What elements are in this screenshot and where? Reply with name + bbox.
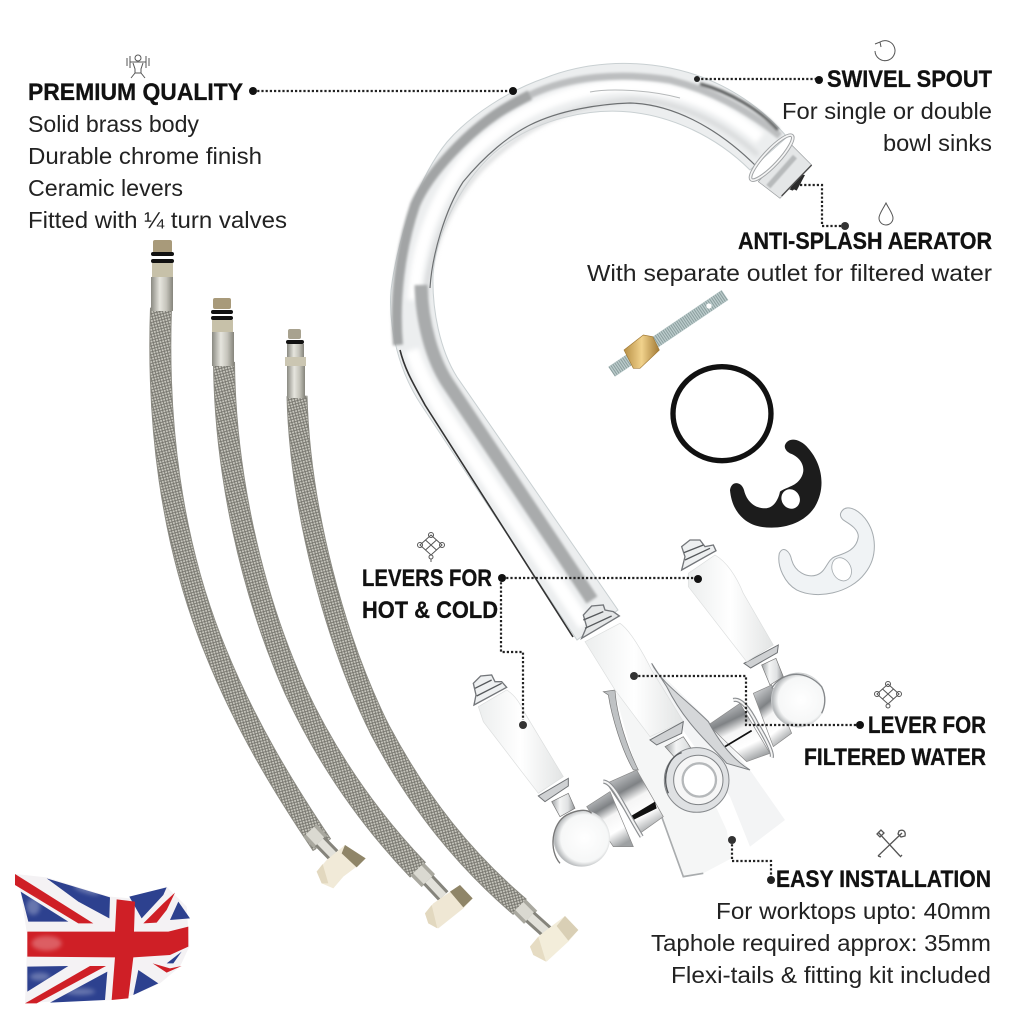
metal washer bbox=[779, 508, 874, 595]
heading: swivel spout bbox=[782, 66, 992, 156]
rear chrome body bbox=[650, 663, 785, 847]
heading: easy installation: Flexi-tails & fitting kit included bbox=[671, 962, 991, 988]
o-ring bbox=[673, 367, 771, 461]
grey body panel bbox=[652, 663, 750, 770]
icon: water drop bbox=[879, 203, 893, 225]
right ball bbox=[771, 673, 826, 727]
heading: lever for filtered water: FILTERED WATER bbox=[804, 744, 986, 771]
spout bbox=[391, 63, 787, 640]
fitting kit: threaded stud, o-ring, rubber gasket, metal washer bbox=[612, 295, 874, 595]
rubber gasket bbox=[730, 440, 822, 528]
leader: easy installation bbox=[728, 836, 775, 884]
flag: union jack bbox=[15, 874, 190, 1003]
icon: rotate arrow bbox=[875, 41, 895, 61]
heading: lever for filtered water: LEVER FOR bbox=[868, 712, 986, 739]
heading: easy installation: For worktops upto: 40mm bbox=[716, 898, 991, 924]
left barrel bbox=[587, 770, 663, 847]
heading: lever for filtered water bbox=[804, 712, 986, 771]
heading: anti-splash aerator: ANTI-SPLASH AERATOR bbox=[738, 228, 992, 255]
threaded stud bbox=[612, 295, 725, 372]
heading: swivel spout: For single or double bbox=[782, 98, 992, 124]
heading: premium quality: Ceramic levers bbox=[28, 175, 183, 201]
heading: anti-splash aerator bbox=[587, 228, 992, 286]
leader: premium quality bbox=[249, 87, 517, 95]
spout end collar and aerator bbox=[746, 131, 812, 198]
icon: knot right bbox=[874, 682, 902, 708]
icon: knot left bbox=[418, 532, 444, 562]
heading: easy installation bbox=[651, 866, 991, 988]
leader: lever for filtered water bbox=[630, 672, 864, 729]
leader: aerator bbox=[800, 185, 849, 230]
heading: anti-splash aerator: With separate outlet for filtered water bbox=[587, 260, 992, 286]
heading: premium quality: PREMIUM QUALITY bbox=[28, 79, 243, 106]
left ball bbox=[553, 810, 610, 867]
front tap body bbox=[603, 690, 732, 877]
heading: easy installation: EASY INSTALLATION bbox=[776, 866, 991, 893]
heading: easy installation: Taphole required approx: 35mm bbox=[651, 930, 991, 956]
icon: wrench and screwdriver bbox=[877, 830, 905, 857]
heading: swivel spout: SWIVEL SPOUT bbox=[827, 66, 992, 93]
tap body and levers bbox=[582, 540, 826, 877]
heading: premium quality: Durable chrome finish bbox=[28, 143, 262, 169]
icon: weightlifter bbox=[127, 55, 149, 78]
left lever bbox=[473, 675, 575, 817]
hose end nuts bbox=[310, 831, 578, 962]
right lever bbox=[682, 540, 783, 685]
heading: premium quality: Solid brass body bbox=[28, 111, 199, 137]
heading: levers for hot and cold bbox=[362, 565, 498, 624]
right barrel bbox=[708, 685, 792, 762]
left lever assembly bbox=[473, 675, 663, 867]
heading: levers for hot and cold: LEVERS FOR bbox=[362, 565, 492, 592]
leader: swivel spout bbox=[694, 76, 823, 84]
leader: levers for hot and cold bbox=[498, 574, 702, 729]
heading: premium quality bbox=[28, 79, 287, 233]
heading: swivel spout: bowl sinks bbox=[883, 130, 992, 156]
hose 2 bbox=[211, 298, 418, 870]
heading: premium quality: Fitted with ¼ turn valves bbox=[28, 207, 287, 233]
heading: levers for hot and cold: HOT & COLD bbox=[362, 597, 498, 624]
hose 1 bbox=[151, 240, 322, 845]
centre lever bbox=[582, 605, 729, 812]
hose 3 bbox=[285, 329, 520, 907]
